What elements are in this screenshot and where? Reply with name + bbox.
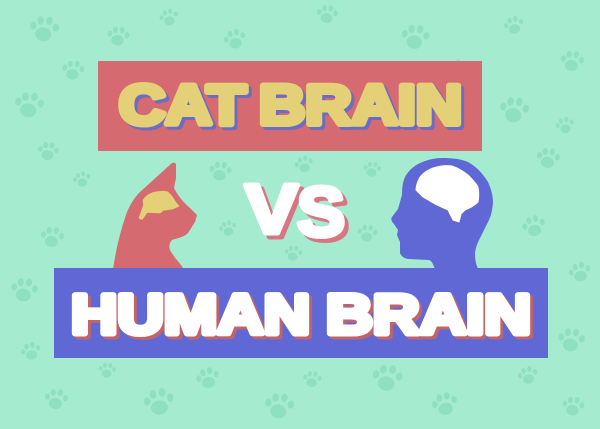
heading shadow: vs: V bbox=[249, 174, 302, 252]
heading shadow: vs: S bbox=[301, 177, 349, 255]
heading shadow: human brain: HUMAN bbox=[74, 286, 313, 348]
heading shadow: cat brain: CAT bbox=[122, 76, 249, 139]
heading: vs: V bbox=[245, 170, 298, 248]
heading shadow: cat brain bbox=[122, 76, 465, 139]
heading: cat brain: BRAIN bbox=[259, 73, 462, 136]
icon: cat brain bbox=[140, 192, 178, 219]
heading shadow: human brain: BRAIN bbox=[329, 286, 534, 348]
heading: cat brain bbox=[119, 73, 462, 136]
icon: cat silhouette with brain bbox=[113, 163, 197, 269]
icon: human head silhouette with brain bbox=[391, 158, 493, 269]
heading shadow: cat brain: BRAIN bbox=[262, 76, 465, 139]
panel: cat brain title banner bbox=[98, 61, 482, 151]
heading: vs bbox=[245, 170, 345, 251]
heading: vs: S bbox=[297, 173, 345, 251]
icon: human brain bbox=[416, 166, 479, 222]
heading: human brain: BRAIN bbox=[326, 282, 531, 346]
heading shadow: human brain bbox=[74, 286, 534, 348]
heading: human brain: HUMAN bbox=[71, 282, 310, 346]
heading: human brain bbox=[71, 282, 531, 346]
panel: human brain title banner bbox=[54, 268, 548, 358]
heading shadow: vs bbox=[249, 174, 349, 255]
heading: cat brain: CAT bbox=[119, 73, 246, 136]
